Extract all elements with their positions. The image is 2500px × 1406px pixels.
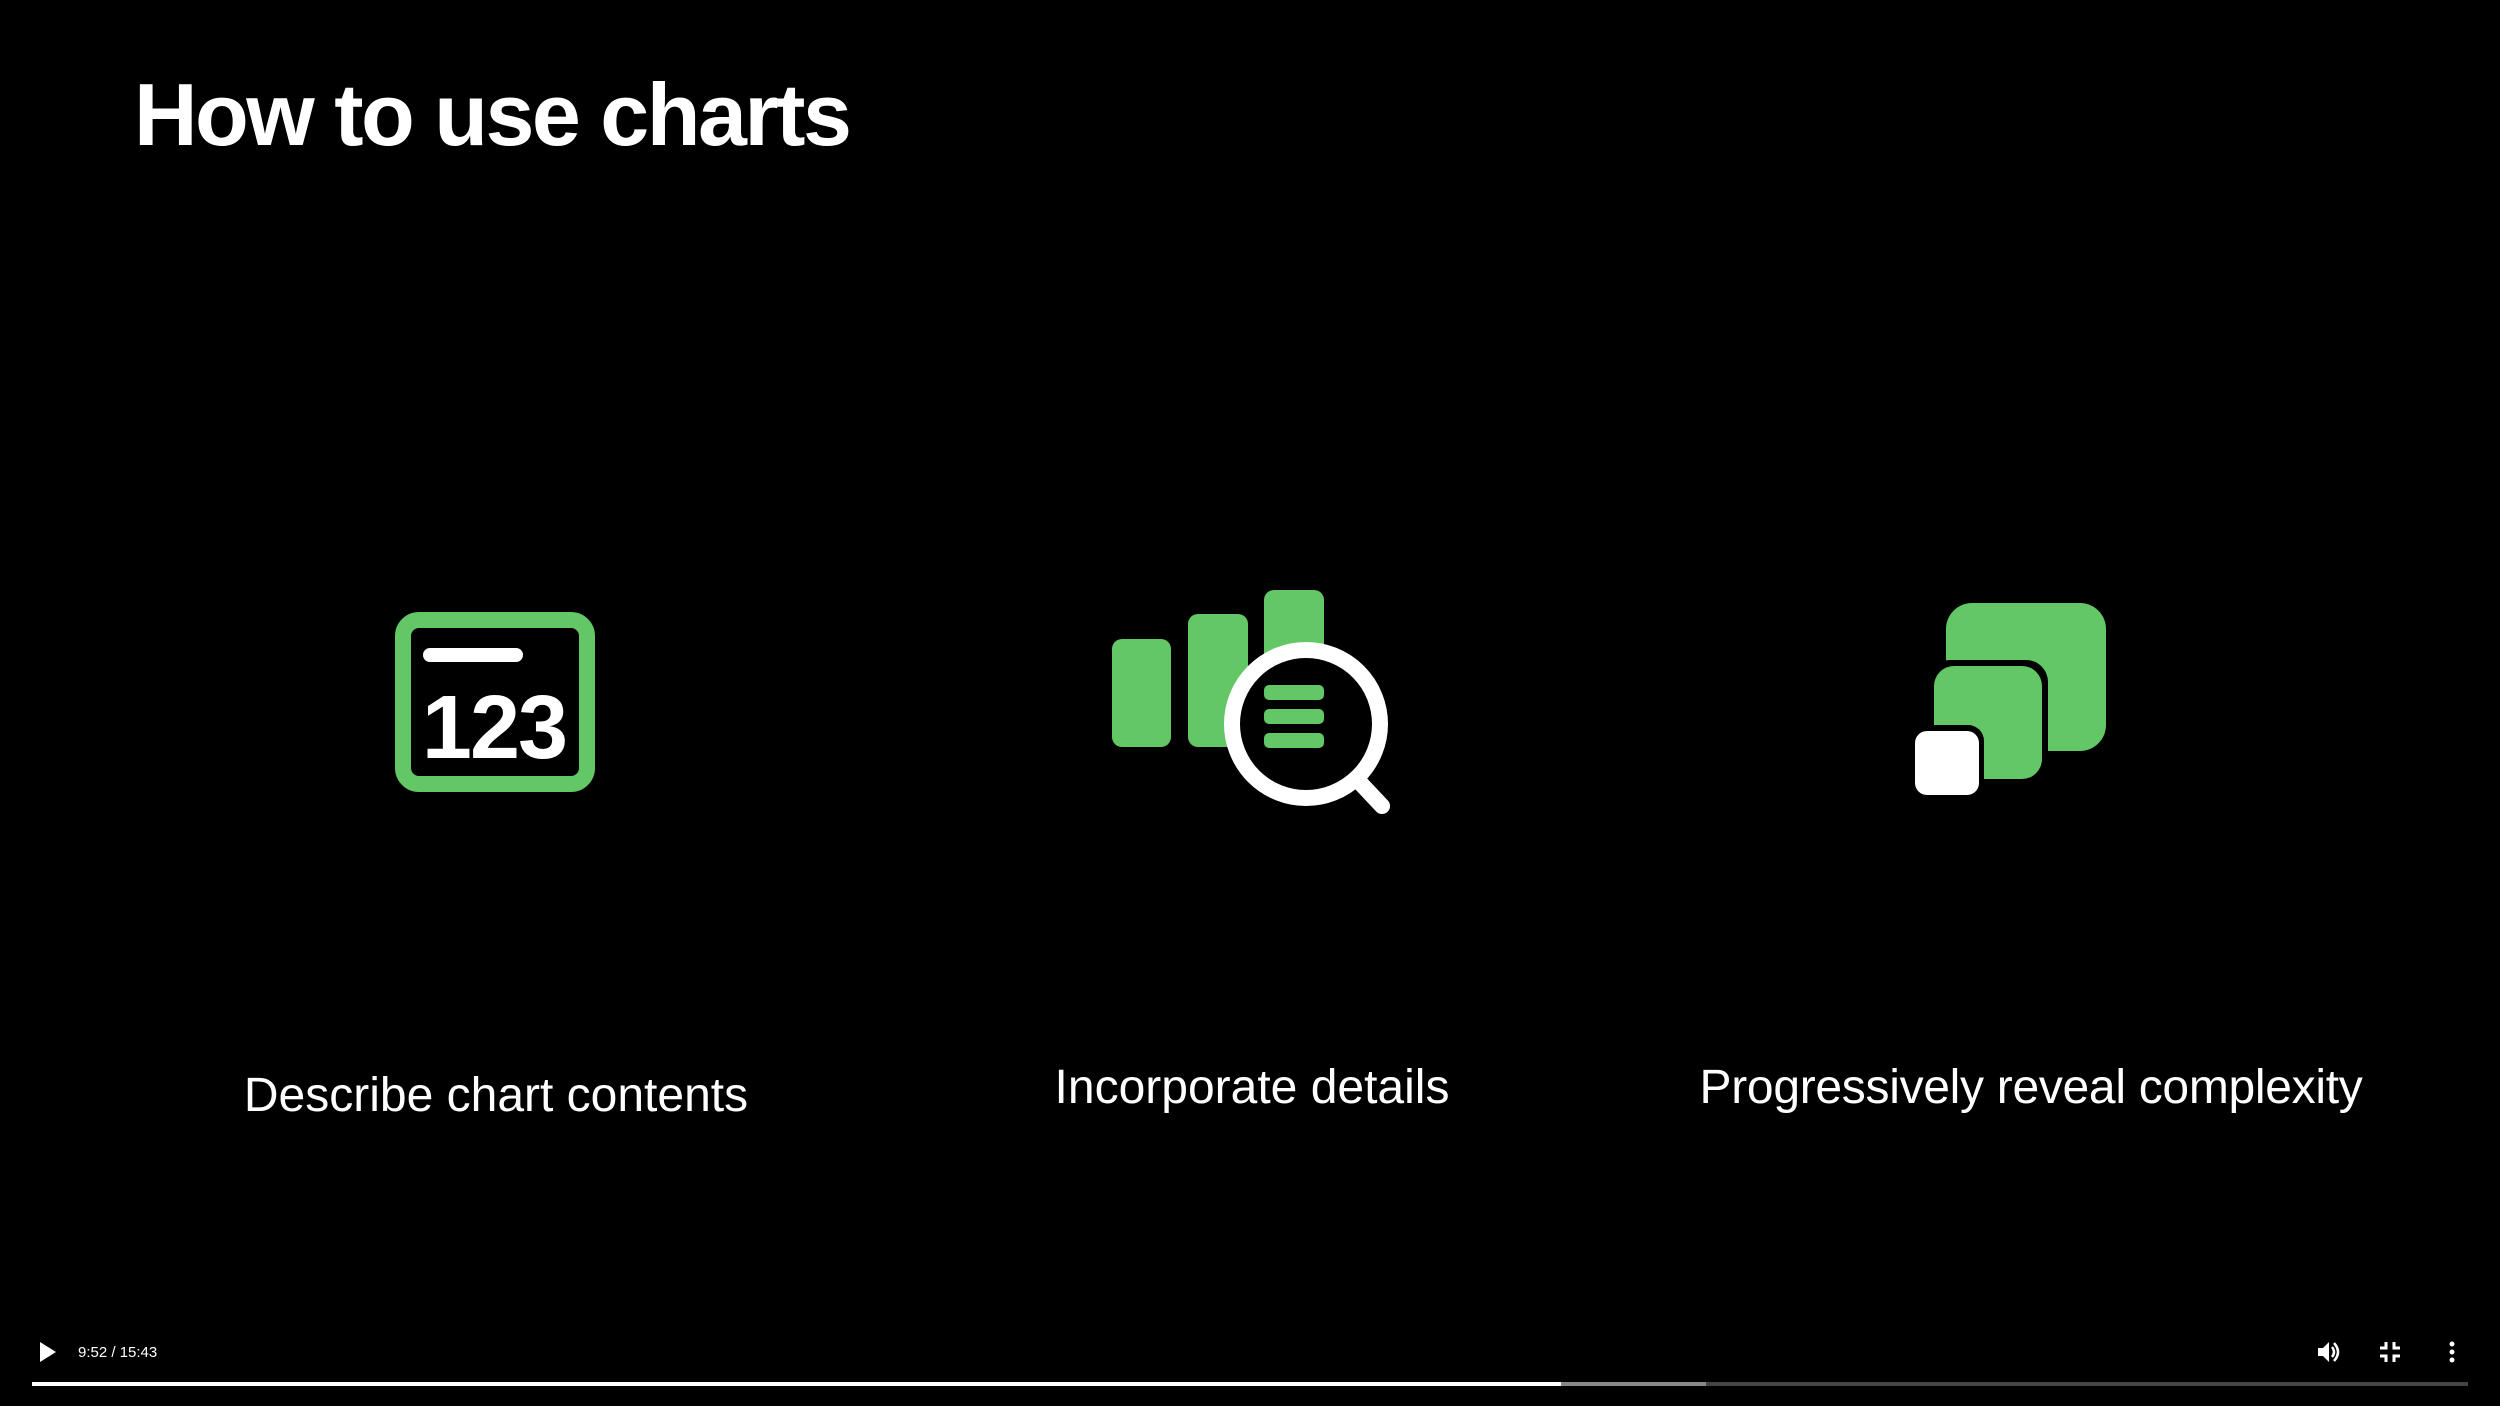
icon: stacked squares — [1915, 603, 2106, 795]
icon: exit fullscreen — [2380, 1342, 2400, 1362]
time text: 9:52 / 15:43 — [78, 1344, 157, 1361]
label: progressively: Progressively reveal complexity — [1700, 1061, 2362, 1114]
label: describe: Describe chart contents — [244, 1069, 748, 1122]
icon: play — [40, 1342, 56, 1362]
label: incorporate: Incorporate details — [1055, 1061, 1449, 1114]
video controls — [32, 1342, 2468, 1386]
icon: 123 card: 123 — [422, 678, 566, 778]
icon: volume — [2318, 1342, 2340, 1362]
icon: more — [2450, 1342, 2454, 1362]
icon: bar chart with magnifier — [1112, 590, 1390, 814]
icon: 123 card — [395, 612, 595, 792]
progress bar — [32, 1382, 2468, 1386]
title: How to use charts — [134, 65, 849, 164]
